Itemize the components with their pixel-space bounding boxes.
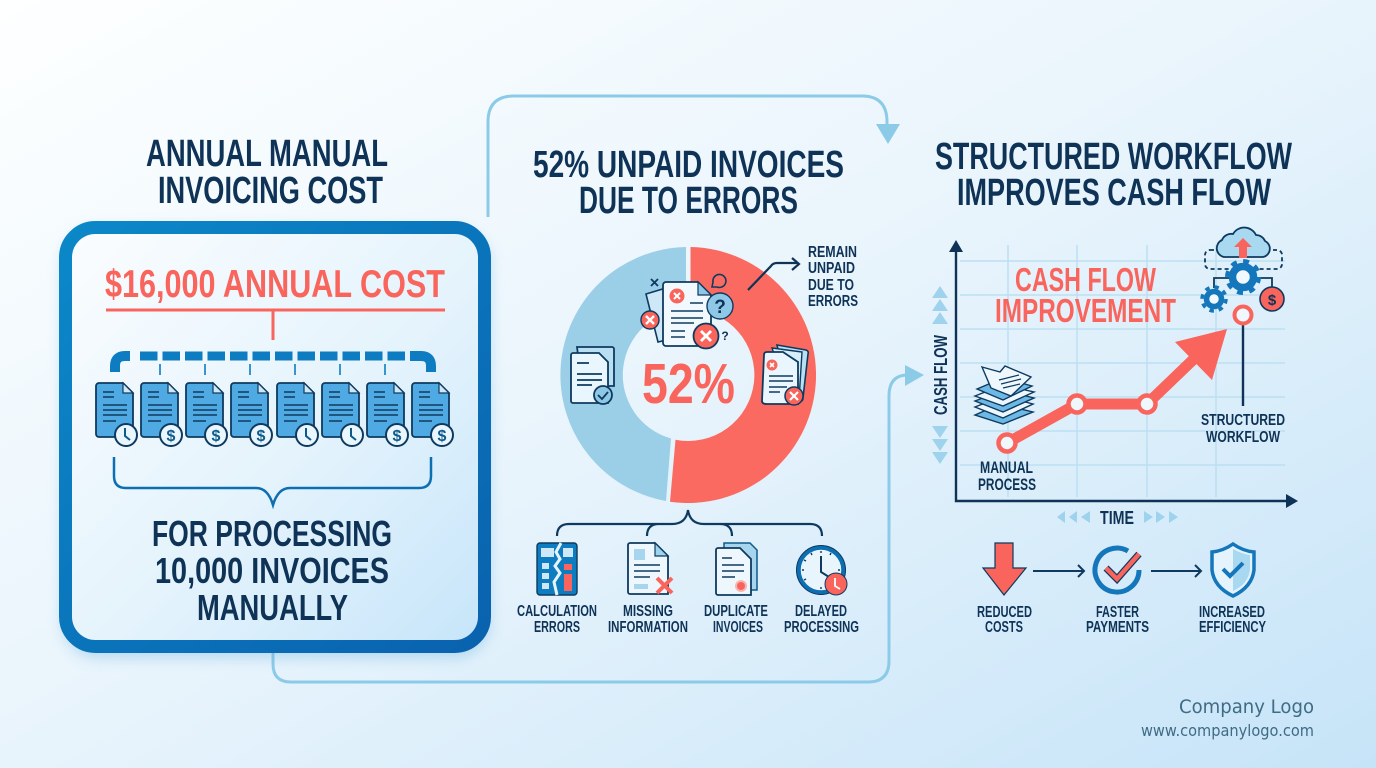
x axis label: [1057, 508, 1178, 528]
callout: remain unpaid due to errors: [748, 244, 858, 310]
bracket: error causes: [557, 510, 822, 536]
cause: duplicate invoices: INVOICES: [713, 619, 763, 636]
y axis label: CASH FLOW: [931, 335, 951, 415]
connector arrow: bottom loop to cash flow chart: [273, 365, 924, 682]
panel caption: FOR PROCESSING: [152, 513, 392, 554]
cost underline connector: [106, 310, 445, 340]
icon: paper stack: [975, 366, 1034, 424]
y axis label: [931, 286, 951, 464]
icon: clock: [796, 546, 847, 595]
heading: annual manual invoicing cost: ANNUAL MANUAL: [146, 133, 388, 175]
cause: delayed processing: [784, 546, 859, 636]
cause: calculation errors: CALCULATION: [517, 603, 597, 620]
panel caption: MANUALLY: [197, 587, 348, 628]
label: manual process: MANUAL: [980, 458, 1033, 477]
company logo: [1141, 696, 1314, 740]
chart title: [995, 261, 1176, 329]
callout: remain unpaid due to errors: REMAIN: [808, 244, 857, 261]
heading: structured workflow: [935, 136, 1292, 214]
arrow: faster payments to increased efficiency: [1151, 565, 1201, 577]
icon: document with x: [628, 543, 672, 594]
benefit: reduced costs: COSTS: [985, 619, 1023, 636]
arrow: reduced costs to faster payments: [1033, 565, 1084, 577]
marker: structured workflow: STRUCTURED: [1201, 412, 1285, 429]
line chart: cash flow improvement: [931, 228, 1298, 528]
cause: calculation errors: [517, 543, 597, 636]
benefit: increased efficiency: [1199, 544, 1266, 636]
connector arrow: top loop to structured workflow: [488, 96, 900, 217]
cost figure: $16,000 ANNUAL COST: [105, 263, 445, 306]
benefit: faster payments: [1086, 548, 1149, 636]
cause: missing information: INFORMATION: [608, 619, 688, 636]
cause: calculation errors: ERRORS: [534, 619, 580, 636]
callout: remain unpaid due to errors: UNPAID: [808, 260, 855, 277]
chart title: CASH FLOW: [1015, 261, 1157, 298]
benefit: faster payments: PAYMENTS: [1086, 619, 1149, 636]
panel caption: [152, 513, 392, 628]
label: manual process: [978, 458, 1036, 494]
benefit: reduced costs: [977, 543, 1032, 636]
x axis label: TIME: [1100, 508, 1134, 528]
company logo: Company Logo: [1179, 696, 1314, 718]
icon: central error document: ?: [721, 329, 729, 343]
heading: 52% unpaid invoices: [533, 144, 844, 222]
icon: central error document: ?: [714, 297, 726, 318]
heading: annual manual invoicing cost: [146, 133, 388, 212]
icon: stacked error documents: [762, 345, 808, 405]
cause: missing information: [608, 543, 688, 636]
cause: delayed processing: PROCESSING: [784, 619, 859, 636]
benefit: reduced costs: REDUCED: [977, 604, 1032, 621]
axes: [949, 240, 1298, 508]
trend arrow: [998, 329, 1227, 452]
heading: 52% unpaid invoices: DUE TO ERRORS: [579, 180, 798, 222]
company logo: www.companylogo.com: [1141, 721, 1314, 740]
heading: 52% unpaid invoices: 52% UNPAID INVOICES: [533, 144, 844, 186]
dashed bracket: [115, 356, 431, 375]
marker: structured workflow: WORKFLOW: [1206, 429, 1281, 446]
donut chart: [560, 247, 816, 503]
brace: [114, 457, 431, 505]
invoice document row: [96, 383, 453, 446]
panel caption: 10,000 INVOICES: [155, 550, 389, 591]
chart title: IMPROVEMENT: [995, 292, 1176, 329]
panel: annual cost: [62, 228, 490, 658]
icon: broken calculator: [537, 543, 577, 595]
benefit: increased efficiency: EFFICIENCY: [1199, 619, 1266, 636]
cause: delayed processing: DELAYED: [795, 603, 847, 620]
icon: duplicate documents: [716, 543, 757, 595]
benefit: faster payments: FASTER: [1096, 604, 1139, 621]
benefit: increased efficiency: INCREASED: [1199, 604, 1265, 621]
cause: duplicate invoices: DUPLICATE: [704, 603, 768, 620]
callout: remain unpaid due to errors: DUE TO: [808, 277, 854, 294]
icon: red down arrow: [983, 543, 1026, 595]
icon: circular check: [1095, 548, 1139, 592]
icon: shield check: [1212, 544, 1254, 596]
heading: annual manual invoicing cost: INVOICING COST: [158, 170, 383, 212]
marker: structured workflow: [1201, 306, 1285, 446]
cause: missing information: MISSING: [623, 603, 673, 620]
label: manual process: PROCESS: [978, 475, 1036, 494]
icon: paid document: [571, 347, 614, 404]
icon: cloud and gears workflow: $: [1268, 292, 1277, 309]
icon: central error document: [641, 274, 733, 348]
percent label: 52%: [642, 352, 735, 416]
icon: cloud and gears workflow: [1202, 228, 1284, 311]
cause: duplicate invoices: [704, 543, 768, 636]
callout: remain unpaid due to errors: ERRORS: [808, 293, 858, 310]
